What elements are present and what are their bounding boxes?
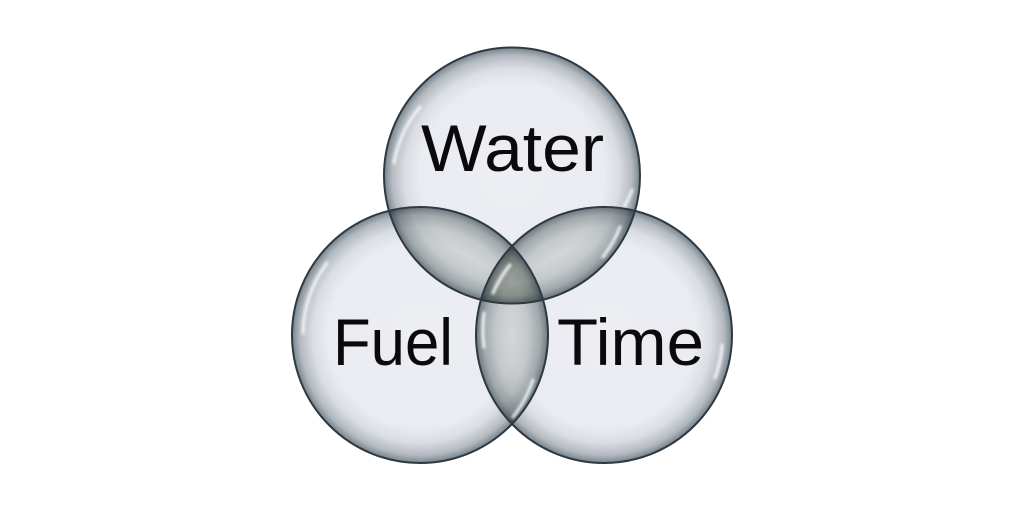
venn diagram — [291, 46, 733, 464]
circle: Fuel — [292, 207, 548, 463]
overlap tint: Fuel and Time — [484, 302, 541, 400]
label: Water: Water — [421, 111, 604, 185]
label: Fuel: Fuel — [333, 305, 453, 379]
circle outlines — [292, 48, 732, 463]
glass highlights — [303, 107, 722, 417]
overlap tint: Water and Time — [518, 214, 616, 292]
circle: Water — [384, 48, 640, 304]
circle: Time — [476, 207, 732, 463]
label: Time: Time — [557, 305, 704, 379]
overlap tint: Water and Fuel — [408, 214, 506, 292]
